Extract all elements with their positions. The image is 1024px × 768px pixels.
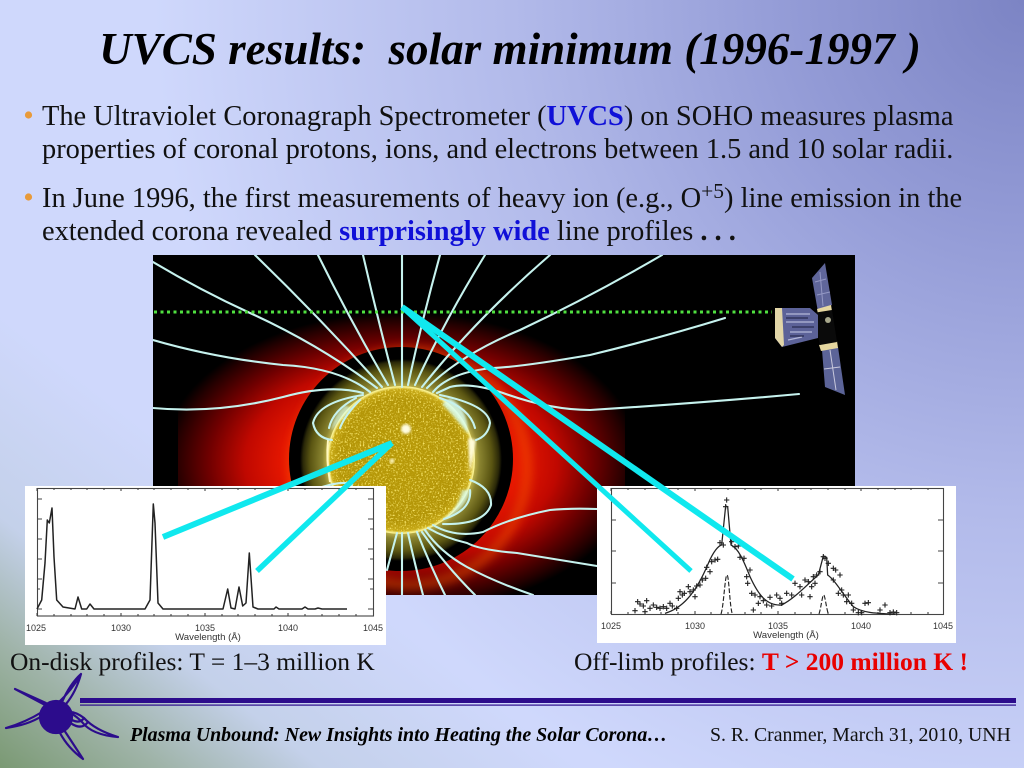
bullet 1: The Ultraviolet Coronagraph Spectrometer (UVCS) on SOHO measures plasma [42, 101, 954, 132]
axis labels: Wavelength (Å) [753, 630, 819, 641]
axis labels: 1025 [601, 621, 621, 631]
occulter disk [289, 347, 513, 571]
axis labels [601, 621, 953, 641]
axis labels: 1025 [26, 623, 46, 633]
axis labels: 1030 [111, 623, 131, 633]
caption: off-limb: Off-limb profiles: T > 200 million K ! [574, 647, 968, 676]
axis labels: 1045 [363, 623, 383, 633]
axis labels: 1035 [195, 623, 215, 633]
panel: off-limb spectrum plot [597, 486, 956, 643]
solar disk [327, 386, 476, 534]
bullet 2: extended corona revealed surprisingly wide line profiles . . . [42, 216, 736, 247]
footer: author and date: S. R. Cranmer, March 31, 2010, UNH [710, 724, 1011, 746]
panel: on-disk spectrum plot [25, 486, 386, 645]
arrow: corona to off-limb plot, second line [402, 307, 793, 579]
narrow reference profiles (dashed) [721, 575, 828, 614]
line of sight: dotted green [154, 310, 772, 314]
bullet 2: +5 [701, 179, 724, 203]
axis labels [26, 623, 383, 643]
bullet 2: ) line emission in the [724, 183, 962, 214]
bullet 2 [25, 179, 962, 247]
bullet list [25, 101, 962, 247]
bullet 2: In June 1996, the first measurements of heavy ion (e.g., O [42, 183, 701, 214]
caption: on-disk: On-disk profiles: T = 1–3 million K [10, 647, 375, 676]
arrow: disk to on-disk plot second line [257, 443, 392, 571]
axis labels: 1045 [933, 621, 953, 631]
solar corona image [153, 255, 855, 595]
spectrum line [37, 504, 347, 609]
arrow: disk to on-disk plot [163, 443, 392, 537]
plot frame and ticks [37, 488, 374, 616]
axis labels: 1040 [851, 621, 871, 631]
plot frame and ticks [611, 488, 944, 614]
bullet 1 [25, 101, 954, 165]
data points: plus markers [632, 497, 899, 615]
axis labels: Wavelength (Å) [175, 632, 241, 643]
axis labels: 1030 [685, 621, 705, 631]
footer: talk title: Plasma Unbound: New Insights into Heating the Solar Corona… [129, 724, 667, 746]
arrow: corona to off-limb plot, first line [402, 307, 691, 571]
icon: solar logo [6, 674, 118, 759]
footer rule [80, 698, 1016, 706]
title: UVCS results: solar minimum (1996-1997 ) [99, 24, 921, 74]
inner corona [300, 359, 502, 561]
magnetic field lines [153, 255, 799, 595]
bullet 1: properties of coronal protons, ions, and electrons between 1.5 and 10 solar radii. [42, 134, 953, 165]
axis labels: 1035 [768, 621, 788, 631]
icon: SOHO spacecraft [775, 263, 845, 395]
fitted profile curves [665, 506, 895, 614]
axis labels: 1040 [278, 623, 298, 633]
red coronal halo [178, 300, 625, 595]
